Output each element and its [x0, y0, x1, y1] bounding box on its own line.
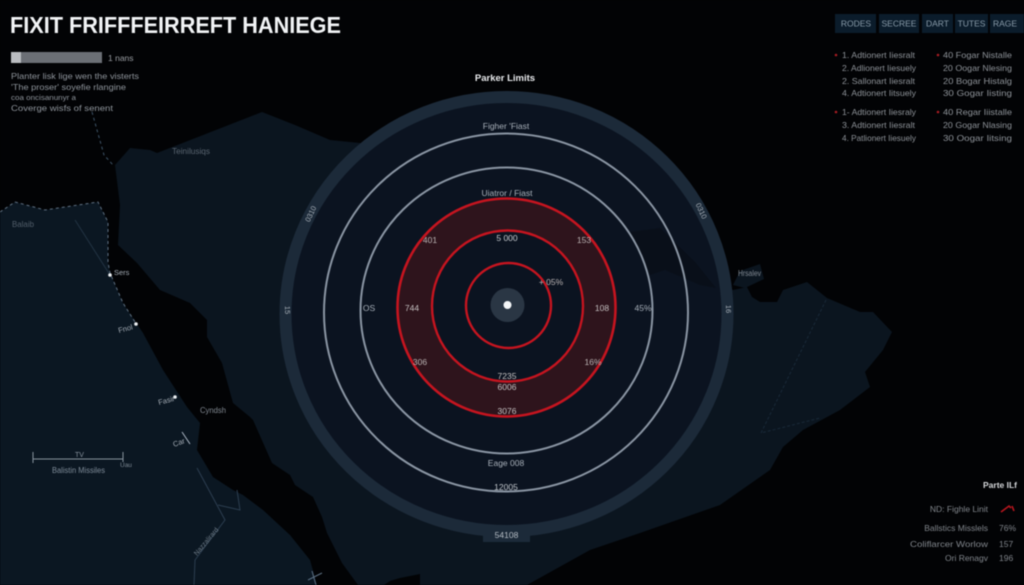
scale unit: Uau — [120, 462, 132, 469]
tab rage — [990, 14, 1024, 33]
tab dart — [922, 14, 953, 33]
right column: 40 Regar Iiistalle — [943, 107, 1012, 117]
right column: 30 Gogar Iisting — [943, 88, 1012, 98]
red outer ring — [398, 198, 616, 416]
legend rows: Ballstics Misslels — [924, 523, 988, 533]
ring dark patch — [630, 228, 716, 288]
tab tutes — [955, 14, 988, 33]
label central coast: Cyndsh — [200, 406, 226, 415]
tick mark — [182, 432, 190, 444]
legend values: 76% — [999, 523, 1016, 533]
scale bar — [33, 452, 132, 475]
description text — [11, 71, 139, 113]
ring labels: 54108 — [495, 530, 519, 540]
label east: Hrsalev — [738, 269, 761, 278]
western landmass — [0, 202, 317, 585]
red bullets — [835, 54, 939, 113]
ring labels: + 05% — [539, 277, 564, 287]
bottom right legend — [910, 480, 1017, 563]
red arrow glyph — [1001, 506, 1014, 512]
fighter ring — [324, 134, 688, 492]
title: FIXIT FRIFFFEIRREFT HANIEGE — [10, 12, 341, 38]
red middle ring — [432, 230, 583, 382]
ring labels: 153 — [577, 235, 591, 245]
eastern landmass — [115, 112, 892, 585]
legend rows: Coliflarcer Worlow — [910, 539, 989, 549]
radar rings chart — [286, 97, 728, 531]
left column: 3. Adtionert Iiesralt — [842, 120, 916, 130]
left column: 2. Adlionert Iiesuely — [842, 63, 917, 73]
label south rotated: Nazzalirard — [193, 527, 220, 557]
marker one: Sers — [114, 268, 130, 277]
left column: 4. Adtionert Iitsuely — [842, 88, 917, 98]
ring labels: 401 — [423, 235, 437, 245]
red zone — [397, 198, 616, 417]
dashed coast border west — [0, 202, 135, 322]
ring labels: 744 — [405, 303, 419, 313]
interior border south — [194, 468, 225, 585]
legend values — [999, 523, 1016, 563]
description text: Coverge wisfs of senent — [11, 103, 114, 113]
description text: coa oncisanunyr a — [11, 95, 76, 102]
legend bar — [11, 52, 134, 63]
ring labels: 16% — [584, 357, 602, 367]
top right list — [835, 50, 1012, 143]
label west: Balaib — [12, 220, 35, 229]
right column: 40 Fogar Nistalle — [943, 50, 1012, 60]
triangle east — [761, 300, 826, 433]
left column: 1- Adtionert Iiesraly — [842, 107, 917, 117]
map markers — [108, 268, 187, 449]
tab secret — [879, 14, 919, 33]
scale top label: TV — [75, 452, 84, 459]
right column: 20 Bogar Histalg — [943, 76, 1012, 86]
island east of ring — [733, 264, 764, 288]
right column — [943, 50, 1012, 143]
cross mark south — [308, 571, 322, 585]
ring labels: OS — [363, 303, 375, 313]
scale line — [33, 452, 123, 463]
left column: 2. Sallonart Iiesralt — [842, 76, 916, 86]
marker three: Fasir — [157, 394, 176, 407]
ring labels: 3076 — [498, 406, 517, 416]
ring labels: Eage 008 — [488, 458, 524, 468]
legend heading: Parte ILf — [983, 480, 1017, 490]
centre dot — [504, 301, 512, 309]
unitary ring — [360, 168, 652, 454]
centre disc — [490, 288, 524, 322]
tab dart: DART — [926, 18, 949, 28]
ring labels: Figher 'Fiast — [483, 121, 530, 131]
map: landmasses — [0, 112, 892, 585]
map labels — [12, 147, 761, 557]
ring labels: Uiatror / Fiast — [481, 188, 533, 198]
interior line west — [75, 220, 110, 275]
left column: 1. Adtionert Iiesralt — [842, 50, 916, 60]
tab tutes: TUTES — [958, 18, 986, 28]
ring labels: 7235 — [498, 371, 517, 381]
legend values: 196 — [999, 553, 1013, 563]
legend values: 157 — [999, 539, 1013, 549]
outer band ring — [286, 97, 728, 531]
left column — [842, 50, 917, 143]
interior angle south — [218, 490, 240, 510]
chart heading: Parker Limits — [475, 73, 535, 84]
scale title: Balistin Missiles — [52, 466, 105, 475]
legend rows — [910, 504, 989, 563]
right column: 30 Oogar Iitsing — [943, 133, 1012, 143]
ring labels: 45% — [634, 303, 652, 313]
ring labels: 5 000 — [496, 233, 518, 243]
ring labels: 108 — [595, 303, 609, 313]
legend rows: ND: Fighle Linit — [930, 504, 989, 514]
bar track — [11, 52, 102, 63]
bar label: 1 nans — [108, 53, 134, 63]
tab rage: RAGE — [993, 18, 1017, 28]
red inner ring — [466, 263, 551, 348]
ring labels: 12005 — [494, 482, 518, 492]
description text: Planter lisk lige wen the visterts — [11, 71, 139, 81]
tab secret: SECREE — [882, 18, 917, 28]
ring labels: 0310 — [303, 204, 318, 223]
left column: 4. Patlionert Iiesuely — [842, 133, 917, 143]
navigation tabs — [835, 14, 1024, 33]
right column: 20 Gogar Nlasing — [943, 120, 1012, 130]
ring labels: 0310 — [694, 201, 709, 220]
map: border lines — [0, 112, 826, 585]
marker two: Fnol — [117, 322, 134, 335]
label north: Teinilusiqs — [172, 147, 210, 156]
ring labels: 306 — [413, 357, 427, 367]
ring labels: 15 — [283, 306, 292, 314]
legend rows: Ori Renagv — [945, 553, 989, 563]
bottom ring tag — [483, 530, 530, 542]
tab nodes: RODES — [841, 18, 871, 28]
tab nodes — [835, 14, 876, 33]
coast dark patch — [384, 574, 420, 585]
description text: 'The proser' soyefie rlangine — [11, 82, 126, 92]
ring labels — [283, 121, 733, 540]
ring labels: 6006 — [498, 382, 517, 392]
bar highlight — [11, 52, 21, 63]
marker four: Car — [172, 436, 187, 449]
ring labels: 16 — [724, 305, 733, 313]
right column: 20 Oogar Nlesing — [943, 63, 1012, 73]
dashed border north — [92, 112, 113, 165]
